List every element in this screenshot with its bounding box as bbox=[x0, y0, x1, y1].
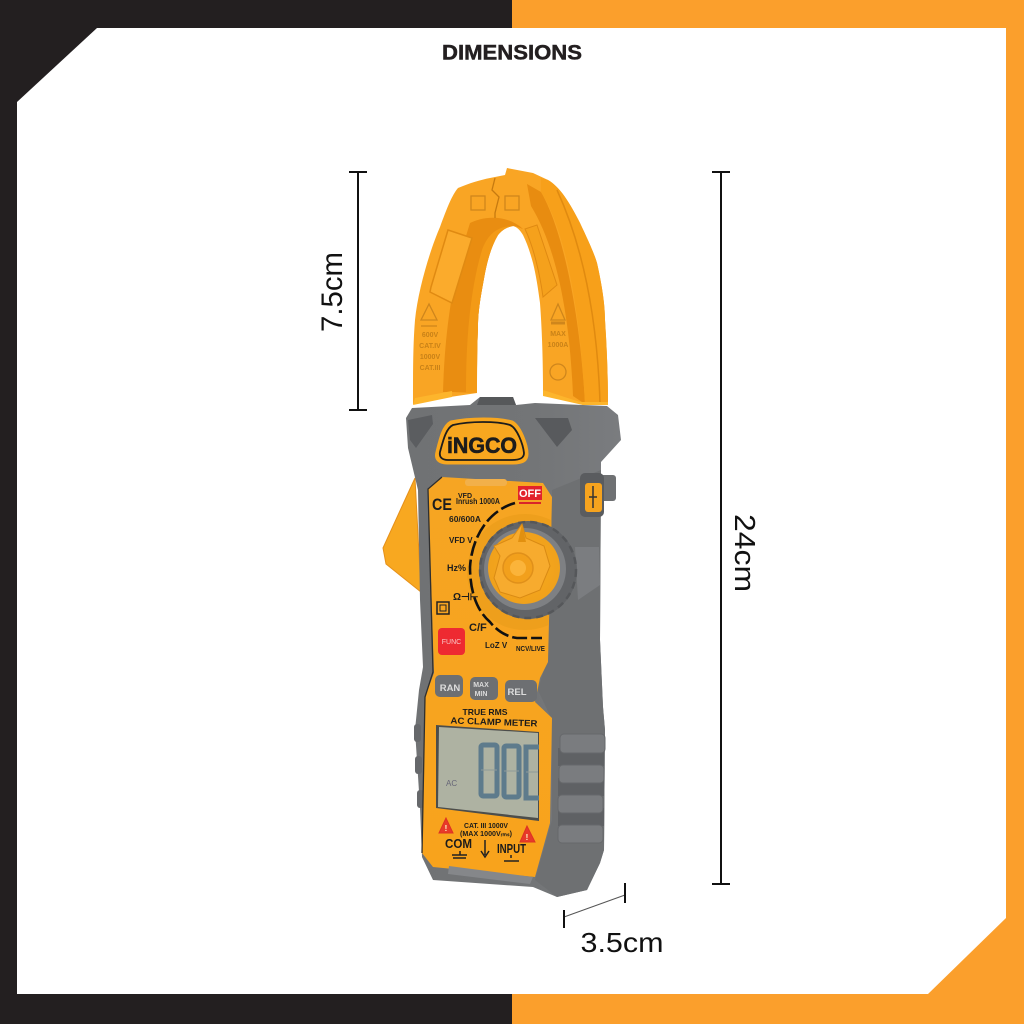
clamp jaws: 1000A bbox=[548, 342, 568, 349]
rotary knob bbox=[479, 521, 577, 619]
top left vent bbox=[408, 415, 433, 448]
FUNC button bbox=[438, 628, 465, 655]
brand badge bbox=[436, 419, 527, 463]
trigger lever bbox=[383, 478, 421, 592]
LCD display bbox=[436, 725, 539, 821]
grey body bbox=[406, 397, 621, 897]
right jaw outer band bbox=[541, 178, 608, 405]
clamp meter bbox=[383, 168, 621, 897]
function dial labels bbox=[432, 493, 545, 653]
dimension: width 3.5cm: 3.5cm bbox=[580, 927, 664, 958]
terminal labels bbox=[445, 821, 526, 856]
clamp jaws: 1000V bbox=[420, 354, 440, 361]
dimension: total height 24cm: 24cm bbox=[728, 514, 760, 592]
title: DIMENSIONS bbox=[442, 40, 582, 64]
function dial labels: VFD bbox=[458, 493, 472, 500]
terminal labels: CAT. III 1000V bbox=[464, 821, 508, 830]
model label bbox=[450, 707, 538, 729]
function dial labels: CE bbox=[432, 495, 452, 514]
MAX MIN button bbox=[470, 677, 498, 700]
dimension: total height 24cm bbox=[712, 172, 760, 884]
clamp jaws: CAT.III bbox=[420, 365, 440, 372]
clamp jaws bbox=[413, 168, 608, 405]
RAN button: RAN bbox=[440, 683, 460, 694]
dimension: clamp height 7.5cm: 7.5cm bbox=[316, 252, 349, 332]
top right vent bbox=[535, 418, 572, 447]
dimension: clamp height 7.5cm bbox=[316, 172, 367, 410]
left grip bumps bbox=[414, 724, 424, 808]
FUNC button: FUNC bbox=[442, 639, 461, 646]
terminal labels: INPUT bbox=[497, 841, 526, 856]
terminal symbols bbox=[452, 840, 519, 861]
dimension: width 3.5cm bbox=[564, 883, 664, 958]
model label: AC CLAMP METER bbox=[450, 715, 538, 729]
function dial labels: VFD V bbox=[449, 536, 473, 545]
inner left jaw band bbox=[443, 218, 523, 393]
OFF label bbox=[518, 486, 542, 504]
warning triangles: ! bbox=[445, 824, 447, 833]
side slide switch bbox=[580, 473, 616, 517]
right jaw dark band bbox=[527, 184, 585, 404]
REL button bbox=[505, 680, 537, 702]
body side shade bbox=[535, 470, 605, 897]
face left edge line bbox=[422, 477, 442, 853]
function dial labels: 60/600A bbox=[449, 515, 481, 524]
warning triangles bbox=[439, 818, 535, 842]
top indent bbox=[465, 479, 507, 486]
function dial labels: C/F bbox=[469, 622, 487, 634]
top nub shade bbox=[477, 397, 516, 405]
OFF label: OFF bbox=[519, 488, 541, 500]
terminal labels: (MAX 1000Vᵣₘₛ) bbox=[460, 829, 512, 838]
function dial labels: NCV/LIVE bbox=[516, 646, 545, 653]
function dial labels: Hz% bbox=[447, 563, 466, 573]
MAX MIN button: MAX bbox=[473, 682, 489, 689]
RAN button bbox=[435, 675, 463, 697]
function dial labels: Inrush 1000A bbox=[456, 497, 500, 506]
inner dial crescent bbox=[467, 515, 552, 630]
LCD display: AC bbox=[446, 779, 457, 788]
jaw markings bbox=[421, 196, 566, 380]
clamp jaws: MAX bbox=[550, 331, 566, 338]
clamp jaws: CAT.IV bbox=[419, 343, 441, 350]
model label: TRUE RMS bbox=[462, 707, 508, 717]
function dial labels: Ω⊣⊢ bbox=[453, 592, 479, 603]
square symbol bbox=[437, 602, 449, 614]
right grip ridges bbox=[558, 734, 605, 843]
clamp jaws: 600V bbox=[422, 332, 438, 339]
dial side bulge bbox=[575, 547, 600, 600]
bottom face lip bbox=[448, 866, 533, 884]
MAX MIN button: MIN bbox=[475, 691, 487, 698]
dashed dial arc bbox=[470, 503, 542, 638]
terminal labels: COM bbox=[445, 836, 472, 851]
jaw pads bbox=[430, 230, 472, 303]
REL button: REL bbox=[508, 687, 527, 698]
jaw seam bbox=[492, 178, 499, 218]
warning triangles: ! bbox=[526, 833, 528, 842]
brand badge: iNGCO bbox=[447, 433, 517, 458]
function dial labels: LoZ V bbox=[485, 641, 508, 650]
orange face bbox=[422, 477, 552, 877]
